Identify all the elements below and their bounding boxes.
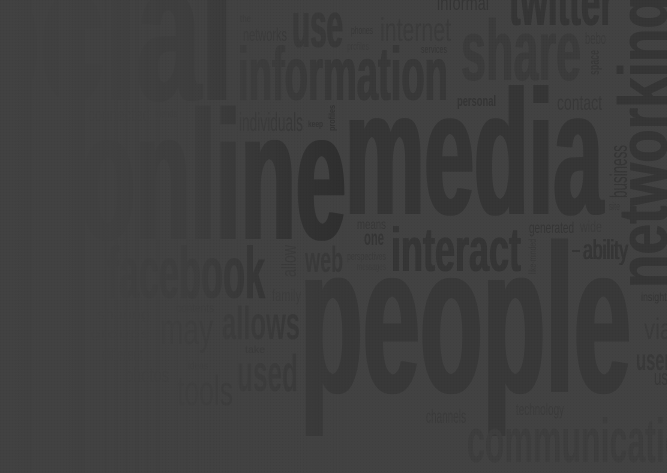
word: profiles: profiles [347,41,369,53]
word: tools: tools [177,367,233,414]
word: take: take [245,345,265,356]
word: means: means [357,216,386,232]
word: information: information [238,32,448,117]
words group: online [80,72,346,278]
word: space vertical: space [586,50,603,75]
word: web: web [304,239,343,280]
word: bebo: bebo [585,29,606,48]
word: messages: messages [357,262,386,273]
word: may: may [160,305,213,354]
word: groups: groups [90,327,150,341]
word: the: the [240,14,251,25]
word: individuals: individuals [239,107,303,137]
word: ability: ability [583,234,628,265]
word: services: services [421,44,447,56]
word: one: one [364,227,384,250]
word: allow vertical: allow [279,245,301,277]
word: ideas: ideas [188,361,208,372]
word: personal: personal [457,93,496,110]
word: like-minded vertical: like-minded [528,239,539,274]
word: family: family [272,286,301,305]
word: interact: interact [391,216,521,285]
word: generated: generated [529,220,574,237]
word: sharing: sharing [97,306,150,322]
word: allows: allows [222,297,300,349]
word: photos: photos [125,365,169,387]
word: wide: wide [579,219,602,236]
word: channels: channels [426,407,466,428]
word: perspectives: perspectives [347,251,386,263]
word: different: different [102,345,143,364]
word: networks: networks [243,25,287,45]
word: internet: internet [380,11,451,48]
word: profiles vertical: profiles [327,105,337,131]
words group: facebook [107,233,265,314]
word: connected: connected [88,105,150,125]
word: site: site [609,201,620,213]
word: friends: friends [155,109,177,120]
word: used: used [237,345,298,403]
word: contact: contact [557,92,602,115]
word: phones: phones [351,25,373,37]
word: technology: technology [516,400,564,419]
word: business vertical: business [606,145,633,198]
word: keep: keep [308,119,323,129]
word: dash [572,250,580,252]
word: contents: contents [176,301,214,315]
